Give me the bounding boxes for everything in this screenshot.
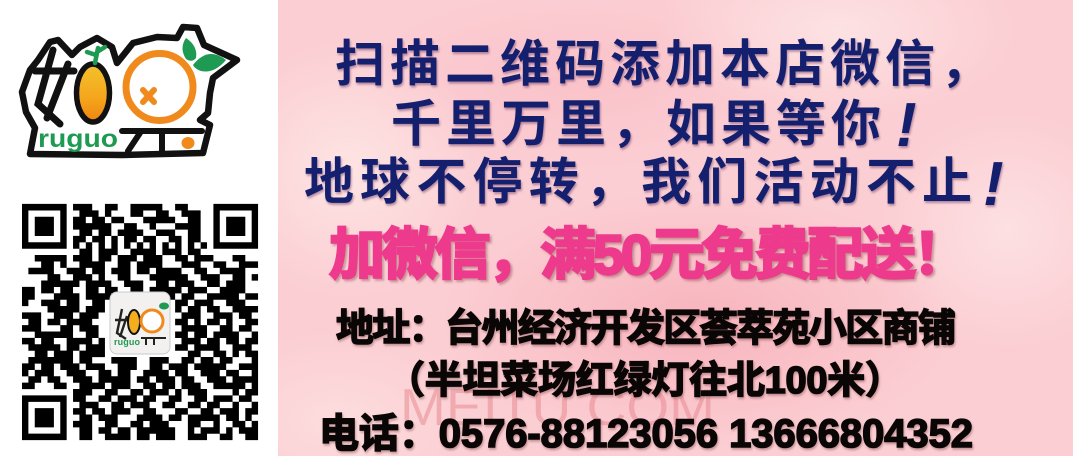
headline line 3: ! bbox=[983, 150, 1004, 219]
tile wordmark: ruguo bbox=[114, 337, 140, 347]
logo outline bbox=[22, 27, 237, 155]
logo wordmark: ruguo bbox=[38, 125, 118, 153]
headline line 3: 地球不停转，我们活动不止 bbox=[304, 154, 972, 210]
address line: 地址：台州经济开发区荟萃苑小区商铺 bbox=[336, 308, 956, 350]
tile orange bbox=[141, 310, 163, 332]
phone line: 电话：0576-88123056 13666804352 bbox=[319, 412, 973, 456]
icon: green leaves bbox=[182, 38, 226, 72]
QR centre logo tile bbox=[110, 292, 170, 354]
icon: orange dot bbox=[182, 137, 194, 149]
logo character strokes bbox=[35, 50, 74, 124]
QR modules bbox=[22, 207, 258, 437]
logo: ruguo bbox=[22, 27, 237, 155]
pink background panel bbox=[278, 0, 1073, 456]
QR code bbox=[22, 207, 258, 437]
icon: mango bbox=[76, 47, 110, 122]
promo line: 加微信，满50元免费配送！ bbox=[329, 223, 969, 286]
tile character strokes bbox=[115, 309, 129, 339]
headline line 2: ! bbox=[896, 91, 917, 160]
headline line 2: 千里万里，如果等你 bbox=[391, 96, 881, 152]
tile leaf bbox=[159, 302, 169, 310]
address note: （半坦菜场红绿灯往北100米） bbox=[387, 360, 903, 402]
tile mango bbox=[128, 310, 140, 334]
logo base strokes bbox=[122, 131, 202, 151]
headline line 1: 扫描二维码添加本店微信， bbox=[335, 36, 990, 92]
tile base bar bbox=[141, 338, 166, 345]
icon: orange ring bbox=[126, 54, 193, 120]
watermark: MEITU.COM bbox=[400, 379, 715, 437]
